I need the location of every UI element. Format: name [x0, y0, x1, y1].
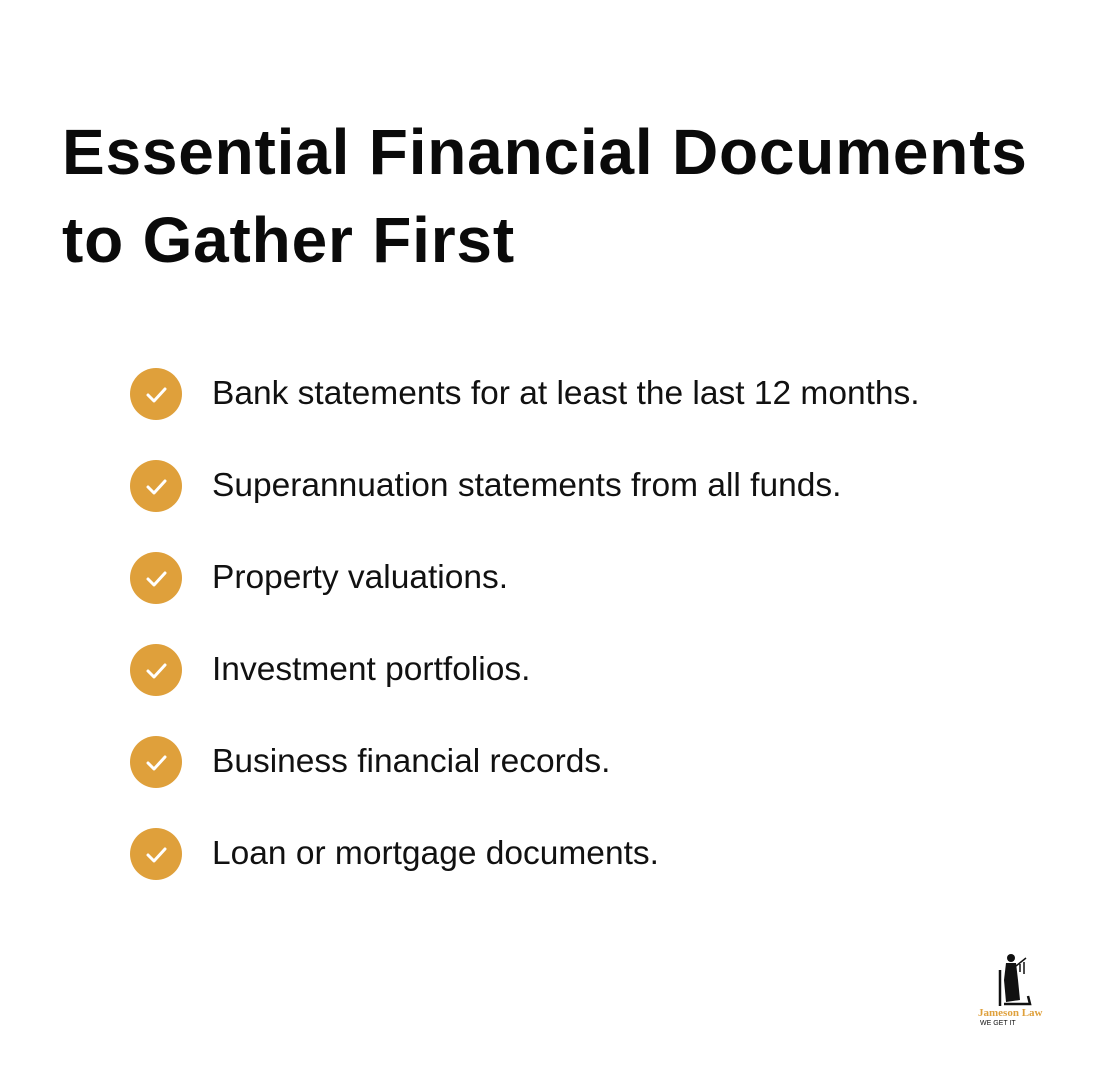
title: Essential Financial Documents	[62, 116, 1028, 188]
checklist item 4	[130, 644, 530, 696]
logo: WE GET IT	[980, 1020, 1016, 1027]
checklist item 3	[130, 552, 508, 604]
checklist item 1	[130, 368, 920, 420]
logo: Jameson Law	[978, 1007, 1042, 1019]
checklist item 4: Investment portfolios.	[212, 651, 530, 688]
checklist item 6: Loan or mortgage documents.	[212, 835, 659, 872]
title: to Gather First	[62, 204, 515, 276]
checklist item 2: Superannuation statements from all funds.	[212, 467, 841, 504]
checklist item 3: Property valuations.	[212, 559, 508, 596]
checklist item 1: Bank statements for at least the last 12 months.	[212, 375, 920, 412]
checklist item 6	[130, 828, 659, 880]
checklist item 2	[130, 460, 841, 512]
checklist item 5	[130, 736, 610, 788]
checklist item 5: Business financial records.	[212, 743, 610, 780]
logo	[978, 954, 1042, 1027]
title	[62, 116, 1028, 276]
